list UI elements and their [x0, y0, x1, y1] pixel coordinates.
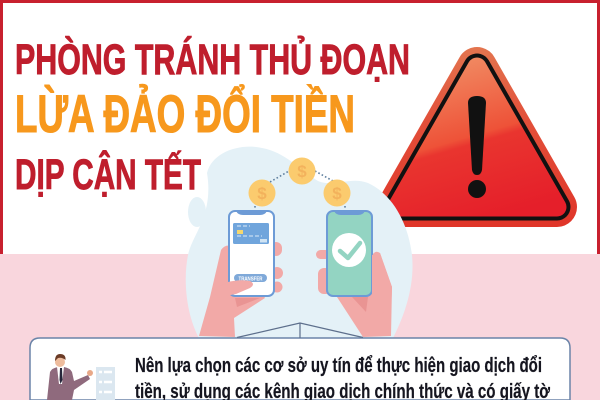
coin top: $: [297, 162, 307, 181]
check badge: [332, 233, 366, 267]
coin left: $: [257, 184, 267, 203]
transfer button: [234, 274, 267, 282]
title line 1: PHÒNG TRÁNH THỦ ĐOẠN: [15, 35, 410, 84]
content panel: [30, 323, 570, 400]
small blob: [188, 197, 206, 227]
coin top: [288, 158, 316, 184]
hand: [87, 370, 93, 376]
advice text: [135, 355, 551, 400]
head: [55, 357, 65, 367]
right hand back: [316, 250, 392, 337]
left hand back: [199, 242, 283, 337]
red page frame: [0, 0, 600, 254]
checklist board: [96, 367, 115, 400]
icon: presenter with checklist: [47, 354, 115, 400]
left phone: [229, 211, 274, 296]
right palm shadow: [352, 297, 368, 312]
coin right: $: [332, 184, 342, 203]
hair: [55, 354, 66, 361]
pink lower background: [0, 254, 600, 400]
suit and arm: [47, 367, 90, 400]
illustration: phone money transfer: [186, 147, 413, 340]
panel tab lines: [237, 323, 363, 338]
right phone: [327, 211, 372, 296]
background blob: [186, 147, 413, 340]
icon: warning triangle: [397, 67, 557, 207]
title line 2: LỪA ĐẢO ĐỔI TIỀN: [15, 84, 355, 144]
shirt and tie: [57, 367, 64, 384]
title: [15, 35, 410, 199]
coin left: [248, 180, 276, 206]
dotted transfer path: [255, 171, 345, 209]
left thumb: [215, 280, 253, 298]
title line 3: DỊP CẬN TẾT: [15, 150, 201, 199]
left phone: TRANSFER: [238, 276, 263, 282]
right palm overlap: [350, 253, 392, 320]
palm shadow: [235, 298, 260, 307]
coin right: [324, 180, 350, 206]
bank card: [233, 223, 269, 244]
